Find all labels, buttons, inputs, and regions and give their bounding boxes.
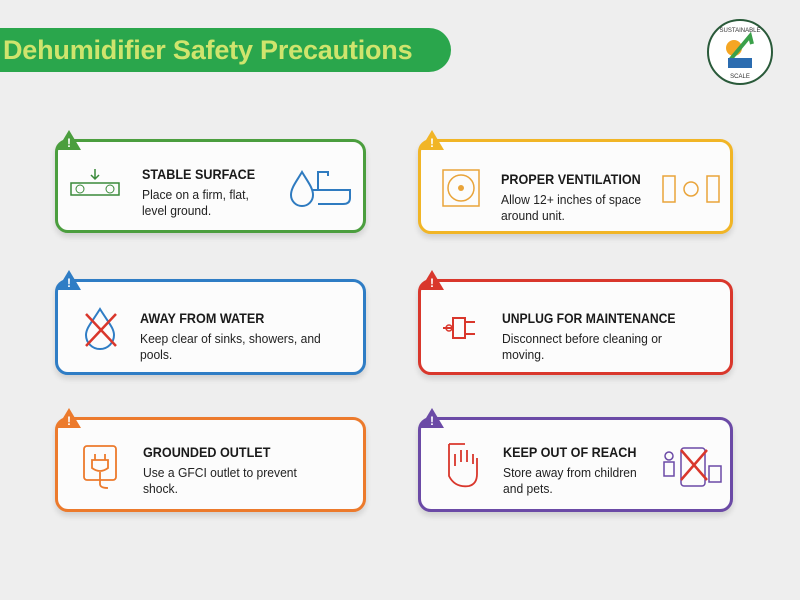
text: Place on a firm, flat, bbox=[142, 187, 249, 202]
icon: warning: ! bbox=[430, 414, 434, 428]
text: Allow 12+ inches of space bbox=[501, 192, 641, 207]
icon: warning bbox=[421, 408, 444, 428]
text: Use a GFCI outlet to prevent bbox=[143, 465, 297, 480]
text bbox=[142, 187, 249, 218]
text bbox=[503, 465, 637, 496]
text: shock. bbox=[143, 481, 178, 496]
icon: warning bbox=[58, 270, 81, 290]
heading: GROUNDED OUTLET bbox=[143, 444, 270, 460]
logo bbox=[707, 19, 773, 85]
icon: plug bbox=[443, 317, 475, 339]
text bbox=[502, 331, 662, 362]
icon: fan bbox=[442, 169, 480, 207]
panel: keep out of reach bbox=[418, 417, 733, 512]
text bbox=[501, 192, 641, 223]
icon: child, unit, pet bbox=[663, 447, 722, 487]
panel: grounded outlet bbox=[55, 417, 366, 512]
icon: warning bbox=[421, 270, 444, 290]
icon: bathtub bbox=[290, 170, 351, 207]
icon: warning bbox=[58, 408, 81, 428]
icon: warning: ! bbox=[67, 414, 71, 428]
icon: no water bbox=[85, 307, 117, 350]
logo: SCALE bbox=[730, 74, 750, 80]
icon: warning: ! bbox=[67, 276, 71, 290]
icon: spacing bbox=[662, 175, 720, 203]
icon: warning: ! bbox=[430, 276, 434, 290]
icon: warning bbox=[58, 130, 81, 150]
text bbox=[140, 331, 321, 362]
icon: warning: ! bbox=[67, 136, 71, 150]
icon: outlet bbox=[83, 445, 117, 489]
text: moving. bbox=[502, 347, 544, 362]
heading: KEEP OUT OF REACH bbox=[503, 444, 636, 460]
text: Store away from children bbox=[503, 465, 637, 480]
text: level ground. bbox=[142, 203, 211, 218]
icon: hand bbox=[448, 443, 478, 488]
heading: AWAY FROM WATER bbox=[140, 310, 264, 326]
panel: away from water bbox=[55, 279, 366, 375]
panel: unplug bbox=[418, 279, 733, 375]
icon: warning: ! bbox=[430, 136, 434, 150]
heading: PROPER VENTILATION bbox=[501, 171, 641, 187]
logo: SUSTAINABLE bbox=[720, 28, 760, 34]
title bbox=[0, 28, 451, 72]
heading: UNPLUG FOR MAINTENANCE bbox=[502, 311, 675, 326]
text: Disconnect before cleaning or bbox=[502, 331, 662, 346]
text: Keep clear of sinks, showers, and bbox=[140, 331, 321, 346]
panel: proper ventilation bbox=[418, 139, 733, 234]
text: pools. bbox=[140, 347, 172, 362]
icon: level bbox=[70, 169, 120, 196]
heading: STABLE SURFACE bbox=[142, 166, 255, 182]
icon: warning bbox=[421, 130, 444, 150]
panel: stable surface bbox=[55, 139, 366, 233]
text: around unit. bbox=[501, 208, 565, 223]
title: Dehumidifier Safety Precautions bbox=[3, 35, 412, 65]
text bbox=[143, 465, 297, 496]
text: and pets. bbox=[503, 481, 553, 496]
